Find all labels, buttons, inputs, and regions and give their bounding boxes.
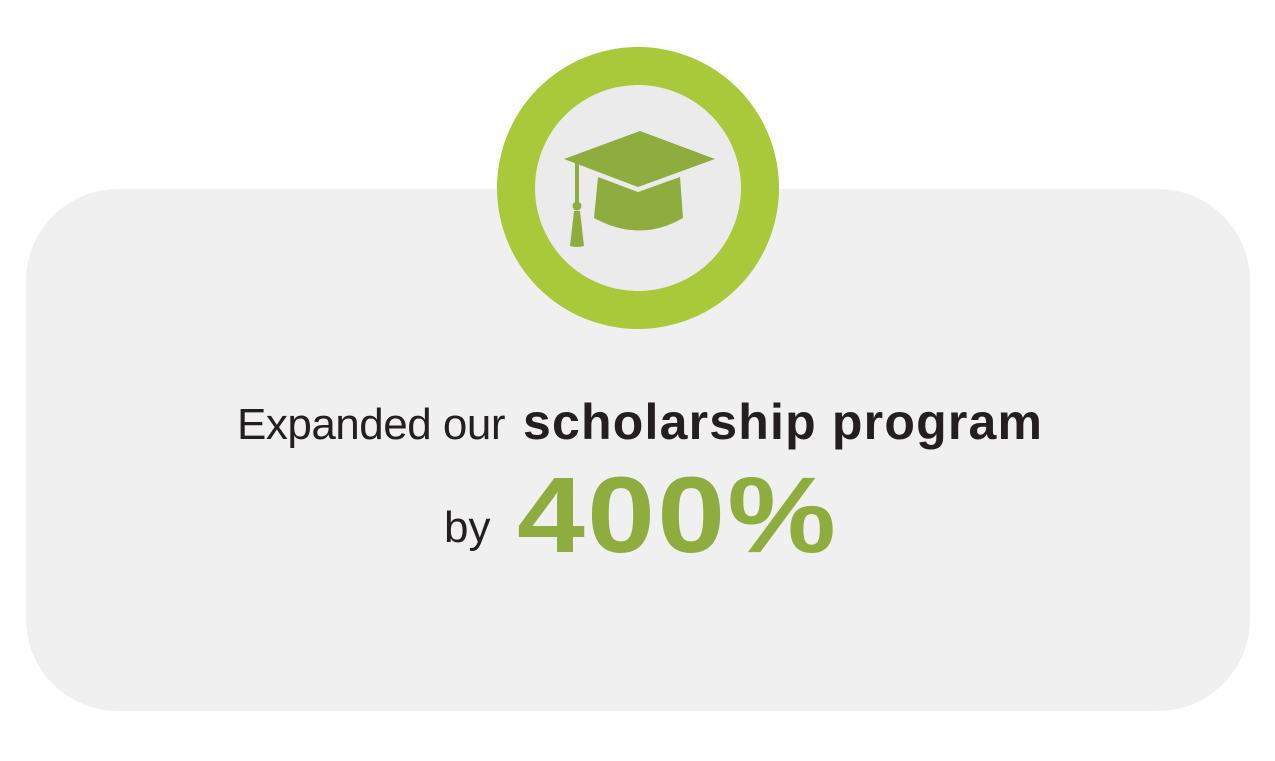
- text: headline line 1: Expanded our scholarship program: [237, 394, 1043, 450]
- text: headline line 2: [444, 454, 838, 575]
- text: headline line 2: by: [444, 503, 490, 552]
- stat: 400%: 400%: [517, 454, 838, 575]
- panel: background card: [26, 189, 1250, 711]
